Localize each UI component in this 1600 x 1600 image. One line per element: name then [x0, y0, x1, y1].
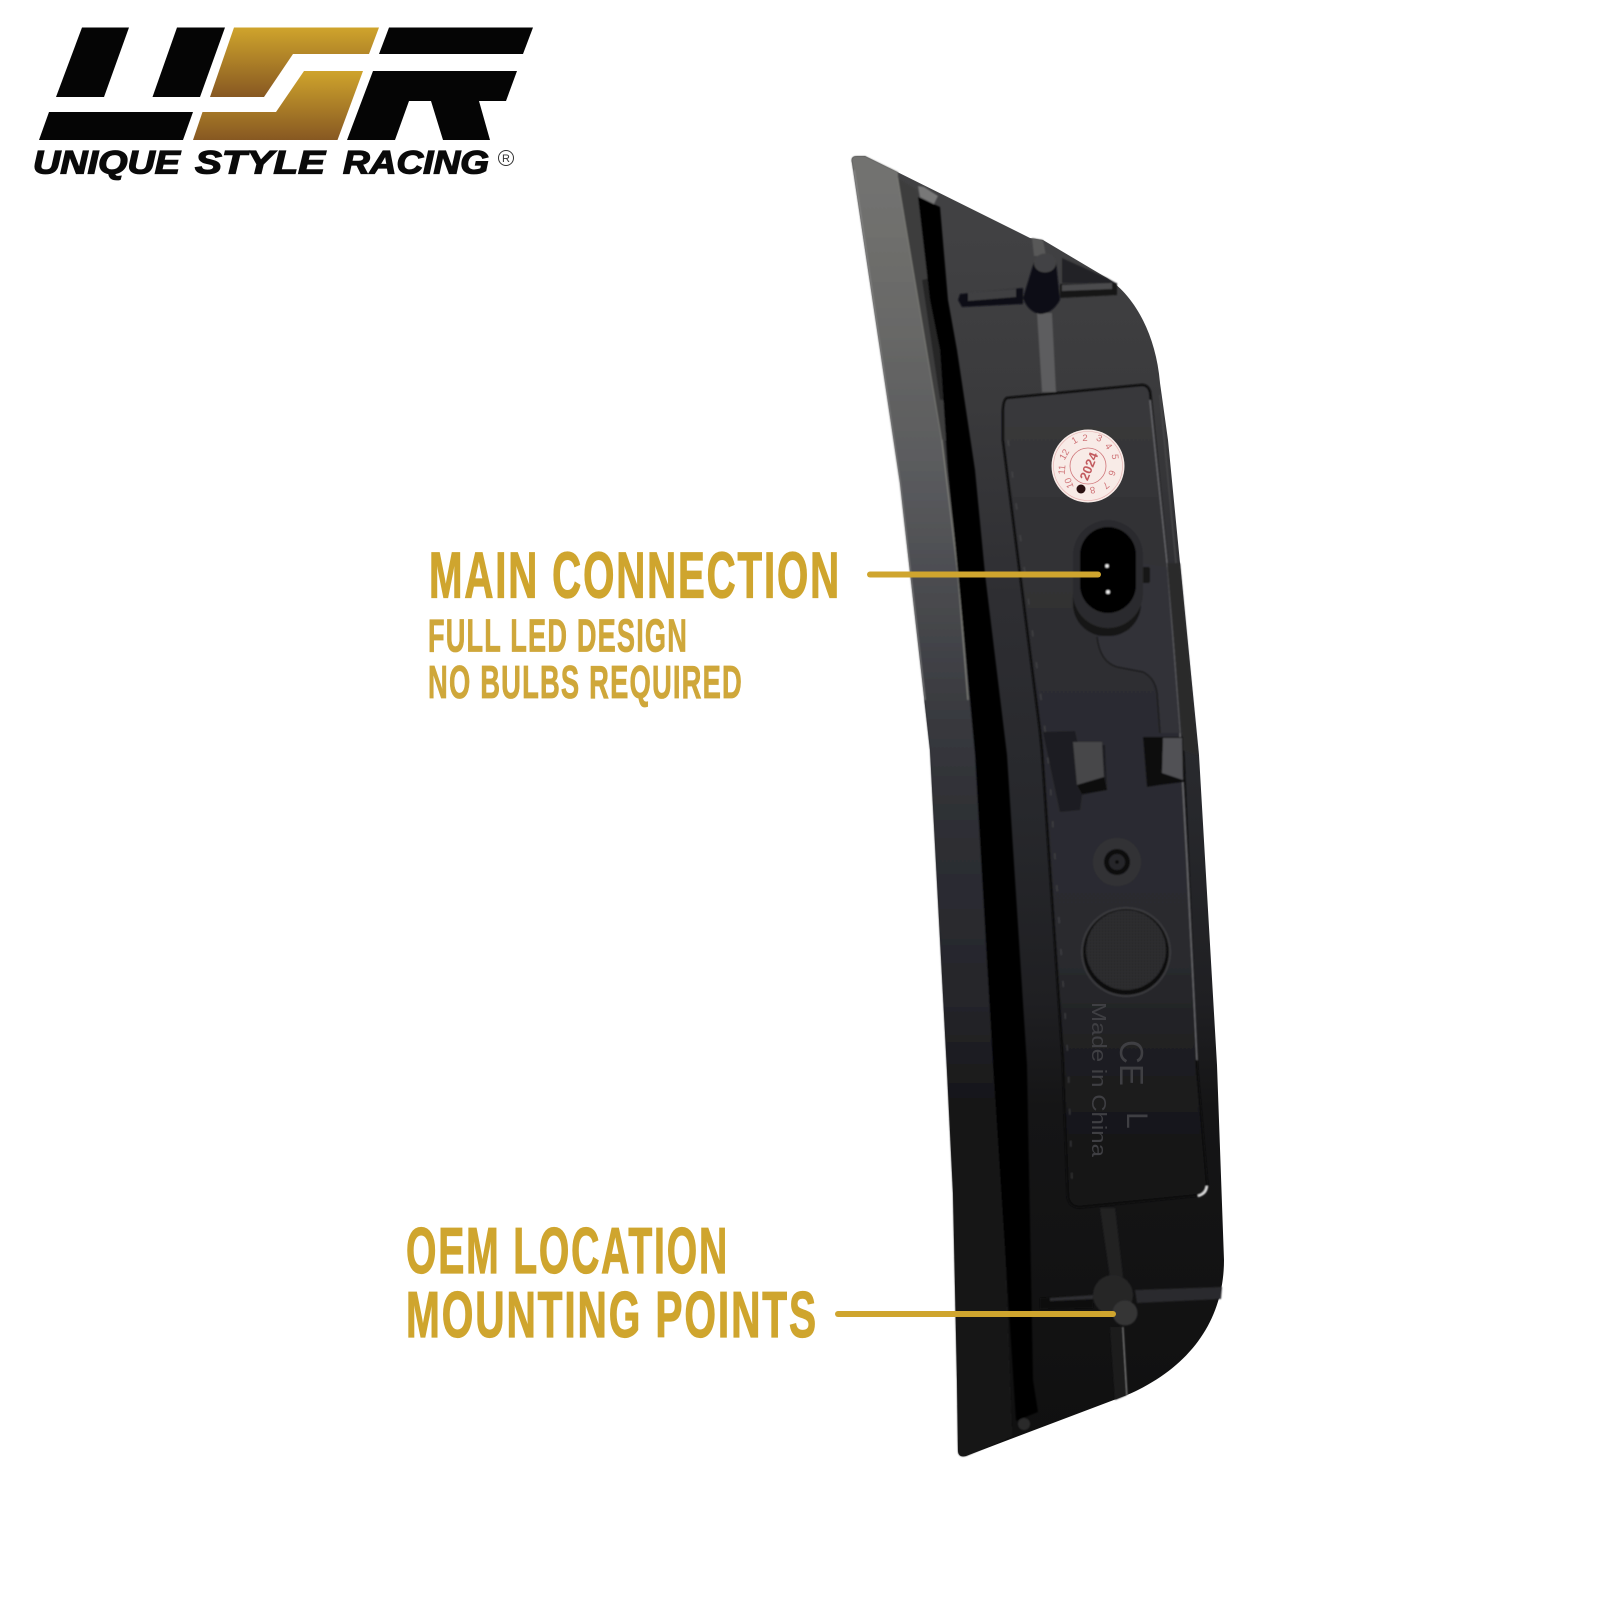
left clip: [1043, 731, 1107, 812]
heading: mounting points: MOUNTING POINTS: [406, 1279, 818, 1351]
date code sticker: 5: [1109, 454, 1120, 460]
lower rib above pin: [1100, 1208, 1123, 1277]
module bottom corner glint: [1198, 1186, 1207, 1196]
connector step hatch edge: [1097, 637, 1160, 733]
connector notch strip: [1167, 563, 1198, 755]
connector side tab: [1142, 567, 1150, 583]
heading: OEM location: OEM LOCATION: [406, 1215, 729, 1287]
date code sticker: 2024: [1076, 449, 1101, 483]
date code sticker: [1052, 430, 1124, 502]
heading: main connection: MAIN CONNECTION: [429, 540, 841, 612]
bottom mounting pin: [1093, 1275, 1138, 1326]
logo: Unique Style Racing: [33, 28, 533, 180]
subtext: full LED design: FULL LED DESIGN: [428, 610, 688, 662]
rib to top pin: [1037, 313, 1056, 392]
leader line to mounting pin: [838, 1311, 1113, 1317]
outer rail line: [1160, 395, 1190, 740]
subtext: no bulbs required: NO BULBS REQUIRED: [428, 656, 743, 708]
logo mark letter S: [193, 28, 379, 140]
round mesh vent: [1081, 907, 1171, 997]
callout: OEM location mounting points: [406, 1215, 1113, 1351]
date code sticker: 3: [1094, 433, 1104, 445]
rear module: [1003, 385, 1207, 1207]
right clip: [1143, 737, 1184, 787]
flange edge highlight: [898, 178, 968, 700]
outer flange: [852, 156, 1012, 1456]
date code sticker: 6: [1105, 468, 1117, 477]
date code sticker: 1: [1070, 435, 1080, 447]
screw boss: [1093, 838, 1141, 886]
date code sticker: 10: [1063, 476, 1077, 490]
embossed: L mark: L: [1120, 1112, 1153, 1129]
logo mark letter U: [39, 28, 225, 140]
product: side marker housing rear view: [852, 156, 1224, 1456]
top mounting pin: [1023, 238, 1060, 314]
registered mark: [498, 150, 514, 166]
logo wordmark: RACING: [343, 144, 489, 180]
inner strip: [898, 178, 950, 440]
main connector socket: [1073, 520, 1143, 636]
module right rim highlight: [1150, 400, 1197, 1060]
registered mark: R: [502, 153, 510, 165]
bottom mount bars: [1040, 1287, 1222, 1309]
date code sticker: 8: [1089, 484, 1096, 495]
housing wedge right of pin: [1062, 258, 1116, 283]
embossed: CE mark: CE: [1113, 1040, 1150, 1086]
channel end nub: [918, 186, 938, 204]
housing silhouette: [852, 156, 1224, 1456]
rib highlight: [1123, 1327, 1127, 1395]
logo wordmark: [33, 144, 489, 180]
date code sticker: 7: [1100, 479, 1111, 491]
top mount bars: [958, 283, 1117, 307]
callout: main connection: [428, 540, 1098, 708]
embossed: Made in China: Made in China: [1087, 1002, 1109, 1158]
logo mark letter R: [347, 28, 533, 140]
date code sticker: 4: [1102, 441, 1114, 452]
date code sticker: 11: [1057, 464, 1068, 475]
logo wordmark: UNIQUE: [33, 144, 182, 180]
date code sticker: 2: [1082, 433, 1088, 444]
inner strip dark band: [922, 278, 948, 400]
lower rib below pin: [1110, 1327, 1127, 1400]
lighter connector step: [1097, 563, 1180, 733]
channel end: [1018, 1418, 1030, 1430]
module left rim speckle: [1008, 440, 1072, 1180]
date code sticker: 12: [1057, 447, 1072, 462]
leader line to connector: [870, 572, 1098, 578]
logo wordmark: STYLE: [195, 144, 327, 180]
black channel: [918, 197, 1038, 1421]
flange outer edge highlight: [854, 170, 925, 700]
